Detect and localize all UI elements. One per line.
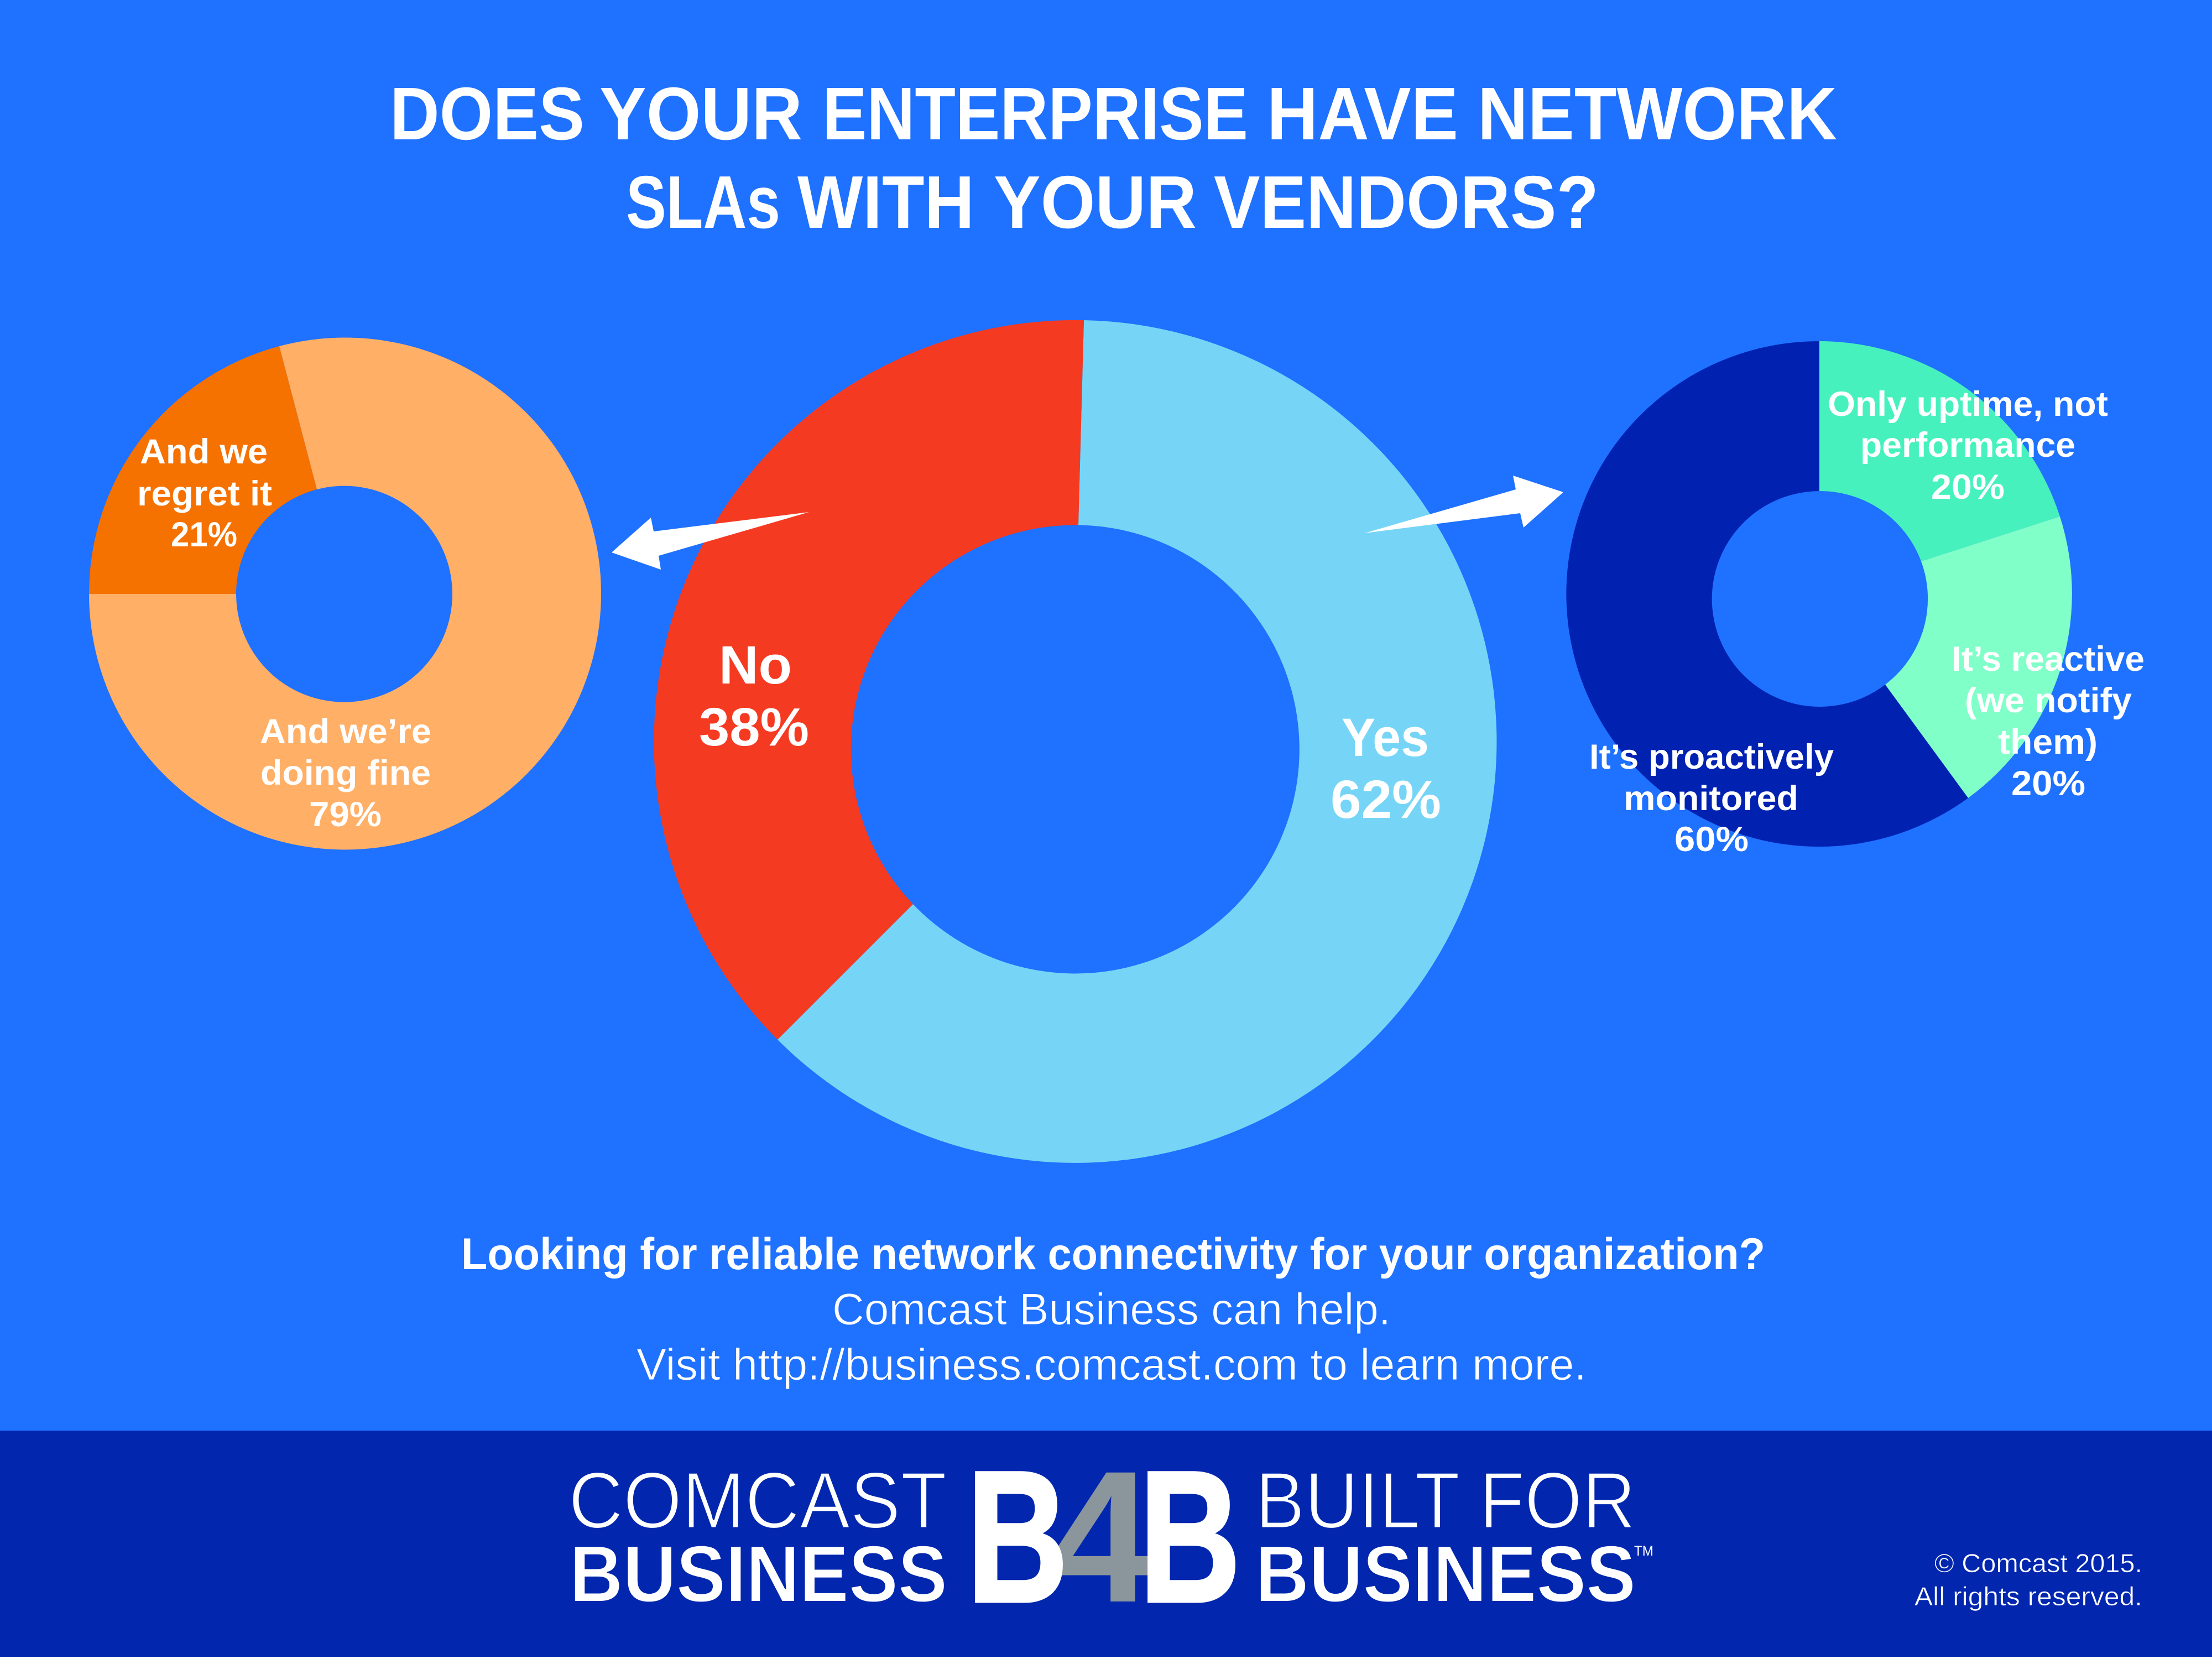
title: HAVE xyxy=(1267,72,1458,155)
copyright xyxy=(1914,1548,2142,1611)
panel: right donut chart (Yes breakdown) xyxy=(1566,341,2145,859)
title: ENTERPRISE xyxy=(822,72,1248,155)
call to action text: Comcast Business can help. xyxy=(832,1285,1391,1334)
title: YOUR xyxy=(599,72,802,155)
label: And we're doing fine 79%: doing fine xyxy=(260,754,431,792)
label: Only uptime, not performance 20%: performance xyxy=(1860,426,2075,465)
logo: B4B: B xyxy=(1139,1433,1241,1641)
label: Yes 62%: Yes xyxy=(1342,707,1429,768)
logo: B4B xyxy=(967,1432,1241,1641)
logo: B4B: B xyxy=(967,1433,1068,1641)
label: And we're doing fine 79%: And we’re xyxy=(260,712,431,751)
arrow: to left donut xyxy=(612,512,809,570)
slice: Only uptime, not performance 20% xyxy=(1819,341,2060,561)
title xyxy=(390,72,1837,244)
copyright: © Comcast 2015. xyxy=(1934,1548,2142,1578)
label: No 38%: No xyxy=(719,635,792,695)
logo: Comcast Business: COMCAST xyxy=(568,1455,947,1545)
title: DOES xyxy=(390,72,585,155)
label: And we regret it 21%: 21% xyxy=(171,515,237,554)
slice: And we regret it 21% xyxy=(89,346,317,594)
title: WITH xyxy=(797,160,974,244)
label: And we regret it 21%: regret it xyxy=(137,474,272,513)
title: YOUR xyxy=(994,160,1197,244)
footer band xyxy=(0,1431,2212,1657)
label: And we're doing fine 79%: 79% xyxy=(309,795,382,834)
label: It's proactively monitored 60% xyxy=(1589,738,1834,859)
label: It's reactive 20%: 20% xyxy=(2011,764,2085,803)
call to action text: Looking for reliable network connectivity for your organization? xyxy=(461,1229,1765,1279)
label: No 38% xyxy=(699,635,809,757)
logo: Comcast Business: BUSINESS xyxy=(570,1529,947,1619)
logo: Built for Business: BUILT FOR xyxy=(1255,1455,1636,1545)
label: It's reactive 20% xyxy=(1952,640,2145,803)
label: Only uptime, not performance 20%: 20% xyxy=(1931,468,2005,507)
label: It's proactively monitored 60%: It’s proactively xyxy=(1589,738,1834,776)
slice: No 38% xyxy=(654,320,1084,1040)
panel: left donut chart (No breakdown) xyxy=(89,337,601,849)
label: Yes 62% xyxy=(1331,707,1441,830)
label: Yes 62%: 62% xyxy=(1331,769,1441,830)
label: It's reactive 20%: It’s reactive xyxy=(1952,640,2145,679)
label: No 38%: 38% xyxy=(699,697,809,757)
arrow: to right donut xyxy=(1365,476,1563,533)
label: Only uptime, not performance 20%: Only uptime, not xyxy=(1828,385,2108,424)
title: VENDORS? xyxy=(1214,160,1599,244)
slice: Yes 62% xyxy=(778,320,1496,1163)
panel: main donut chart xyxy=(654,320,1496,1163)
call to action text xyxy=(461,1229,1765,1390)
label: And we regret it 21% xyxy=(137,432,272,554)
label: It's reactive 20%: them) xyxy=(1998,723,2098,761)
logo: Built for Business: BUSINESS xyxy=(1255,1529,1636,1619)
label: Only uptime, not performance 20% xyxy=(1828,385,2108,507)
title: NETWORK xyxy=(1478,72,1837,155)
bottom edge xyxy=(0,1657,2212,1659)
logo: Built for Business xyxy=(1255,1455,1653,1619)
title: SLAs xyxy=(626,160,780,244)
label: And we're doing fine 79% xyxy=(260,712,431,834)
slice: It's proactively monitored 60% xyxy=(1566,341,1968,847)
slice: It's reactive 20% xyxy=(1885,517,2072,798)
label: And we regret it 21%: And we xyxy=(140,432,268,471)
slice: And we're doing fine 79% xyxy=(89,337,601,849)
logo: Comcast Business xyxy=(568,1455,947,1619)
logo: B4B: 4 xyxy=(1049,1432,1155,1641)
logo: Built for Business: TM xyxy=(1634,1543,1653,1559)
call to action text: Visit http://business.comcast.com to learn more. xyxy=(637,1340,1587,1390)
label: It's reactive 20%: (we notify xyxy=(1965,681,2132,720)
label: It's proactively monitored 60%: monitored xyxy=(1624,779,1798,818)
copyright: All rights reserved. xyxy=(1914,1582,2142,1611)
label: It's proactively monitored 60%: 60% xyxy=(1674,820,1749,859)
